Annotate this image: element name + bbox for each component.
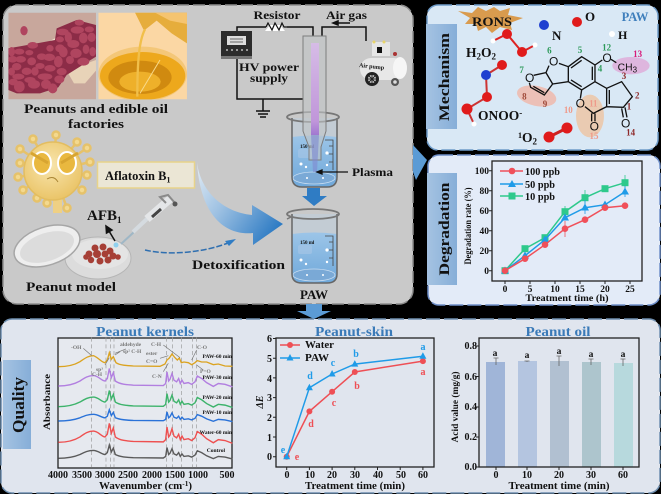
photo: peanuts in wooden tray: [8, 13, 96, 99]
label: Degradation: [427, 173, 457, 285]
label: AFB1: AFB: [87, 208, 117, 224]
molecule: aflatoxin B1 structure: O: [549, 54, 558, 68]
heading: Peanut oil: Peanut oil: [526, 324, 591, 339]
chart: peanut-skin color difference: [255, 324, 434, 492]
arrow: to mechanism and degradation panels: [413, 145, 427, 180]
line chart: degradation rate: 25: [625, 285, 635, 295]
diagram: plasma jet tube: [303, 36, 326, 172]
molecule: singlet oxygen: 2: [533, 136, 538, 146]
labels: spectra series: PAW-20 min: [202, 395, 232, 401]
molecule: aflatoxin B1 structure: [515, 43, 650, 141]
molecule: aflatoxin B1 structure: 11: [589, 98, 598, 108]
chart: peanut-skin color difference: 10: [305, 470, 315, 481]
chart: peanut-skin color difference: 0: [284, 470, 290, 481]
series: 100 ppb: [502, 202, 628, 274]
arrow: AFB1 injection: [106, 226, 115, 241]
chart: peanut oil acid value: 0.4: [464, 402, 477, 413]
line chart: degradation rate: [463, 161, 642, 304]
molecule: aflatoxin B1 structure: O: [590, 120, 599, 134]
label: air gas: Air gas: [326, 8, 367, 22]
line chart: degradation rate: 60: [480, 207, 489, 217]
chart: peanut kernels FTIR: 2500: [118, 470, 138, 481]
labels: spectra series: PAW-10 min: [202, 410, 232, 416]
label: HV power supply: HV power: [239, 60, 300, 74]
molecule: aflatoxin B1 structure: 3: [633, 66, 638, 75]
chart: peanut kernels FTIR: 3000: [95, 470, 115, 481]
molecule: aflatoxin B1 structure: 13: [633, 49, 643, 59]
label: detoxification: Detoxification: [192, 258, 285, 272]
line chart: degradation rate: 80: [480, 187, 489, 197]
chart: peanut-skin color difference: 30: [350, 470, 360, 481]
diagram: beaker 1 with water: [287, 112, 339, 187]
legend: atoms: O: [585, 9, 595, 24]
arrow: large blue curved arrow: [197, 162, 283, 245]
molecule: aflatoxin B1 structure: O: [525, 71, 534, 85]
significance letters: e: [281, 445, 286, 456]
chart: peanut-skin color difference: 5: [267, 354, 272, 365]
annotations: functional groups: ester: [146, 351, 158, 357]
chart: peanut-skin color difference: 6: [267, 334, 272, 345]
chart: peanut-skin color difference: ΔE: [255, 395, 266, 409]
chart: peanut oil acid value: 30: [586, 470, 596, 481]
chart: peanut oil acid value: Treatment time (min): [508, 481, 610, 492]
molecule: H2O2: H: [466, 45, 477, 60]
label: AFB1: 1: [117, 215, 122, 225]
chart: peanut oil acid value: 0: [494, 470, 498, 481]
labels: spectra series: [200, 354, 232, 454]
series: 10 ppb: [502, 175, 628, 274]
chart: peanut-skin color difference: 40: [373, 470, 383, 481]
molecule: aflatoxin B1 structure: 5: [578, 45, 583, 55]
chart: peanut kernels FTIR: 4000: [48, 470, 68, 481]
panel: mechanism: [426, 5, 658, 150]
molecule: singlet oxygen: [518, 122, 572, 146]
labels: spectra series: Water-60 min: [200, 430, 232, 436]
diagram: HV power supply box: [221, 31, 252, 59]
chart: peanut-skin color difference: Treatment time (min): [305, 481, 405, 492]
annotations: functional groups: C=O: [146, 359, 158, 365]
chart: peanut oil acid value: 60: [618, 470, 628, 481]
molecule: aflatoxin B1 structure: 9: [543, 99, 548, 109]
diagram: circuit wiring: [237, 27, 366, 111]
chart: peanut oil acid value: Acid value (mg/g): [450, 372, 461, 442]
arrow: detoxification dashed curve: [145, 239, 236, 253]
series: 50 ppb: [501, 186, 629, 274]
series: water: [284, 358, 426, 460]
chart: peanut oil acid value: 10: [522, 470, 532, 481]
label: Aflatoxin B1: Aflatoxin B: [105, 169, 166, 183]
legend: atoms: N: [552, 28, 562, 43]
annotations: functional groups: sp³: [96, 367, 103, 373]
labels: spectra series: PAW-60 min: [202, 354, 232, 360]
molecule: ONOO-: ONOO: [478, 108, 519, 123]
chart: peanut oil acid value: 0.8: [464, 341, 477, 352]
chart: peanut-skin color difference: 4: [267, 374, 272, 385]
panel: quality: [1, 319, 660, 493]
label: Aflatoxin B1: 1: [166, 176, 170, 184]
photo: edible oil bowl: [98, 13, 187, 101]
chart: peanut oil acid value: a: [621, 350, 626, 360]
annotations: functional groups: [71, 342, 211, 380]
chart: peanut oil acid value: 0.6: [464, 372, 477, 383]
caption: peanuts and edible oil factories: factories: [68, 116, 124, 131]
chart: peanut kernels FTIR: 1500: [165, 470, 185, 481]
molecule: H2O2: 2: [477, 52, 482, 62]
molecule: aflatoxin B1 structure: 4: [598, 63, 603, 73]
diagram: beaker 1 with water: 150 ml: [300, 145, 315, 150]
chart: peanut kernels FTIR: Absorbance: [43, 374, 53, 430]
arrow: air gas flow: [333, 21, 350, 25]
annotations: functional groups: -OH: [71, 345, 82, 351]
annotations: functional groups: sp² C-H: [123, 349, 142, 355]
panel: process overview: [3, 5, 413, 304]
significance letters: c: [332, 398, 337, 409]
chart: peanut oil acid value: a: [589, 350, 594, 360]
chart: peanut oil acid value: a: [493, 349, 498, 359]
line chart: degradation rate: 40: [480, 227, 489, 237]
bars: acid value: [486, 361, 633, 467]
icon: micropipette: [114, 195, 178, 248]
significance letters: a: [420, 342, 426, 353]
line chart: degradation rate: 20: [600, 285, 610, 295]
icon: RONS burst: [458, 7, 523, 33]
molecule: aflatoxin B1 structure: 14: [626, 128, 636, 138]
legend: water and PAW: PAW: [305, 353, 329, 364]
annotations: functional groups: C-H: [92, 372, 103, 378]
label: Degradation: Degradation: [437, 182, 453, 276]
molecule: ONOO-: [462, 60, 522, 126]
arrow: beaker to PAW: [302, 188, 327, 206]
label: PAW: PAW: [622, 10, 649, 24]
significance letters: b: [353, 349, 359, 360]
molecule: aflatoxin B1 structure: O: [576, 96, 585, 110]
annotations: functional groups: C-O: [197, 345, 208, 351]
heading: Peanut-skin: Peanut-skin: [315, 324, 394, 339]
legend: atoms: [539, 9, 628, 43]
legend: concentrations: 10 ppb: [525, 192, 555, 203]
label: resistor: Resistor: [254, 8, 301, 22]
significance letters: d: [307, 371, 313, 382]
legend: atoms: H: [618, 28, 628, 42]
icon: air pump: Air pump: [359, 63, 385, 72]
icon: air pump: [359, 40, 407, 86]
icon: ground: [256, 111, 270, 117]
arrow: to quality panel: [297, 304, 331, 319]
icon: petri dish with peanuts: [9, 217, 131, 279]
line chart: degradation rate: Degradation rate (%): [463, 188, 473, 264]
molecule: aflatoxin B1 structure: CH: [618, 63, 633, 74]
molecule: H2O2: [466, 29, 538, 62]
labels: spectra series: PAW-30 min: [202, 375, 232, 381]
label: plasma with arrow: [317, 165, 393, 179]
molecule: aflatoxin B1 structure: 10: [564, 105, 573, 115]
molecule: aflatoxin B1 structure: 3: [622, 71, 627, 81]
chart: peanut oil acid value: 20: [554, 470, 564, 481]
chart: peanut oil acid value: a: [557, 347, 562, 357]
legend: concentrations: 50 ppb: [525, 180, 555, 191]
molecule: singlet oxygen: 1: [518, 131, 522, 140]
legend: water and PAW: [280, 340, 335, 364]
label: Quality: Quality: [9, 377, 28, 433]
significance letters: a: [420, 367, 426, 378]
icon: aflatoxin virus: [14, 132, 94, 213]
line chart: degradation rate: Treatment time (h): [526, 293, 608, 304]
chart: peanut kernels FTIR: ): [188, 481, 193, 492]
significance letters: [281, 342, 426, 463]
label: PAW: PAW: [300, 287, 328, 302]
annotations: functional groups: C-H: [151, 342, 162, 348]
molecule: aflatoxin B1 structure: 12: [602, 43, 612, 53]
line chart: degradation rate: 20: [480, 247, 489, 257]
diagram: beaker 2 PAW: 150 ml: [300, 241, 315, 246]
series: PAW: [283, 352, 426, 459]
molecule: aflatoxin B1 structure: 8: [522, 92, 527, 102]
label: Aflatoxin B1: [98, 162, 194, 188]
annotations: functional groups: C-N: [152, 374, 162, 380]
line chart: degradation rate: 15: [575, 285, 585, 295]
significance letters: b: [354, 381, 360, 392]
molecule: aflatoxin B1 structure: 7: [519, 65, 524, 75]
molecule: aflatoxin B1 structure: 1: [627, 102, 632, 112]
chart: peanut oil acid value: 0.2: [464, 432, 477, 443]
molecule: aflatoxin B1 structure: 6: [547, 46, 552, 56]
label: HV power supply: supply: [250, 71, 288, 85]
chart: peanut-skin color difference: 3: [267, 393, 272, 404]
labels: spectra series: Control: [207, 448, 225, 454]
molecule: ONOO-: -: [519, 108, 522, 118]
molecule: aflatoxin B1 structure: O: [621, 116, 630, 130]
legend: concentrations: 100 ppb: [525, 167, 560, 178]
chart: peanut oil acid value: [450, 324, 639, 492]
diagram: beaker 2 PAW: [287, 209, 339, 283]
chart: peanut-skin color difference: 2: [267, 413, 272, 424]
molecule: aflatoxin B1 structure: 15: [589, 131, 599, 141]
chart: peanut kernels FTIR: Wavenumber (cm: [99, 481, 179, 492]
significance letters: d: [308, 419, 314, 430]
panel: degradation: [427, 155, 660, 305]
chart: peanut-skin color difference: 60: [418, 470, 428, 481]
chart: peanut oil acid value: 0.0: [464, 462, 477, 473]
chart: peanut kernels FTIR: 1000: [188, 470, 208, 481]
significance letters: e: [295, 452, 300, 463]
line chart: degradation rate: 0: [484, 267, 489, 277]
caption: peanuts and edible oil factories: Peanuts and edible oil: [24, 101, 168, 116]
line chart: degradation rate: 5: [528, 285, 533, 295]
label: Mechanism: [426, 24, 457, 129]
icon: RONS burst: RONS: [472, 14, 512, 29]
chart: peanut kernels FTIR: -1: [182, 480, 189, 488]
annotations: functional groups: P=O: [200, 369, 211, 375]
heading: Peanut kernels: Peanut kernels: [96, 324, 194, 339]
line chart: degradation rate: 100: [475, 167, 489, 177]
icon: resistor: [265, 23, 287, 31]
molecule: aflatoxin B1 structure: O: [602, 51, 612, 65]
legend: water and PAW: Water: [305, 340, 335, 351]
molecule: aflatoxin B1 structure: 2: [635, 91, 640, 101]
chart: peanut-skin color difference: 0: [267, 452, 272, 463]
chart: peanut kernels FTIR: [43, 324, 234, 492]
label: peanut model: Peanut model: [26, 279, 116, 294]
molecule: H2O2: 2: [492, 52, 497, 62]
significance letters: c: [331, 358, 336, 369]
molecule: H2O2: O: [481, 45, 492, 60]
chart: peanut kernels FTIR: 2000: [142, 470, 162, 481]
label: Quality: [3, 360, 31, 449]
chart: peanut oil acid value: a: [525, 351, 530, 361]
chart: peanut-skin color difference: 1: [267, 433, 272, 444]
legend: concentrations: [500, 167, 560, 203]
chart: peanut-skin color difference: 50: [396, 470, 406, 481]
line chart: degradation rate: 0: [503, 285, 508, 295]
annotations: functional groups: aldehyde: [120, 342, 142, 348]
molecule: singlet oxygen: O: [522, 130, 533, 145]
chart: peanut kernels FTIR: 3500: [72, 470, 92, 481]
line chart: degradation rate: 10: [550, 285, 560, 295]
chart: peanut kernels FTIR: 500: [220, 470, 234, 481]
label: plasma with arrow: Plasma: [352, 165, 393, 179]
label: Mechanism: Mechanism: [437, 32, 453, 121]
chart: peanut-skin color difference: 20: [327, 470, 337, 481]
